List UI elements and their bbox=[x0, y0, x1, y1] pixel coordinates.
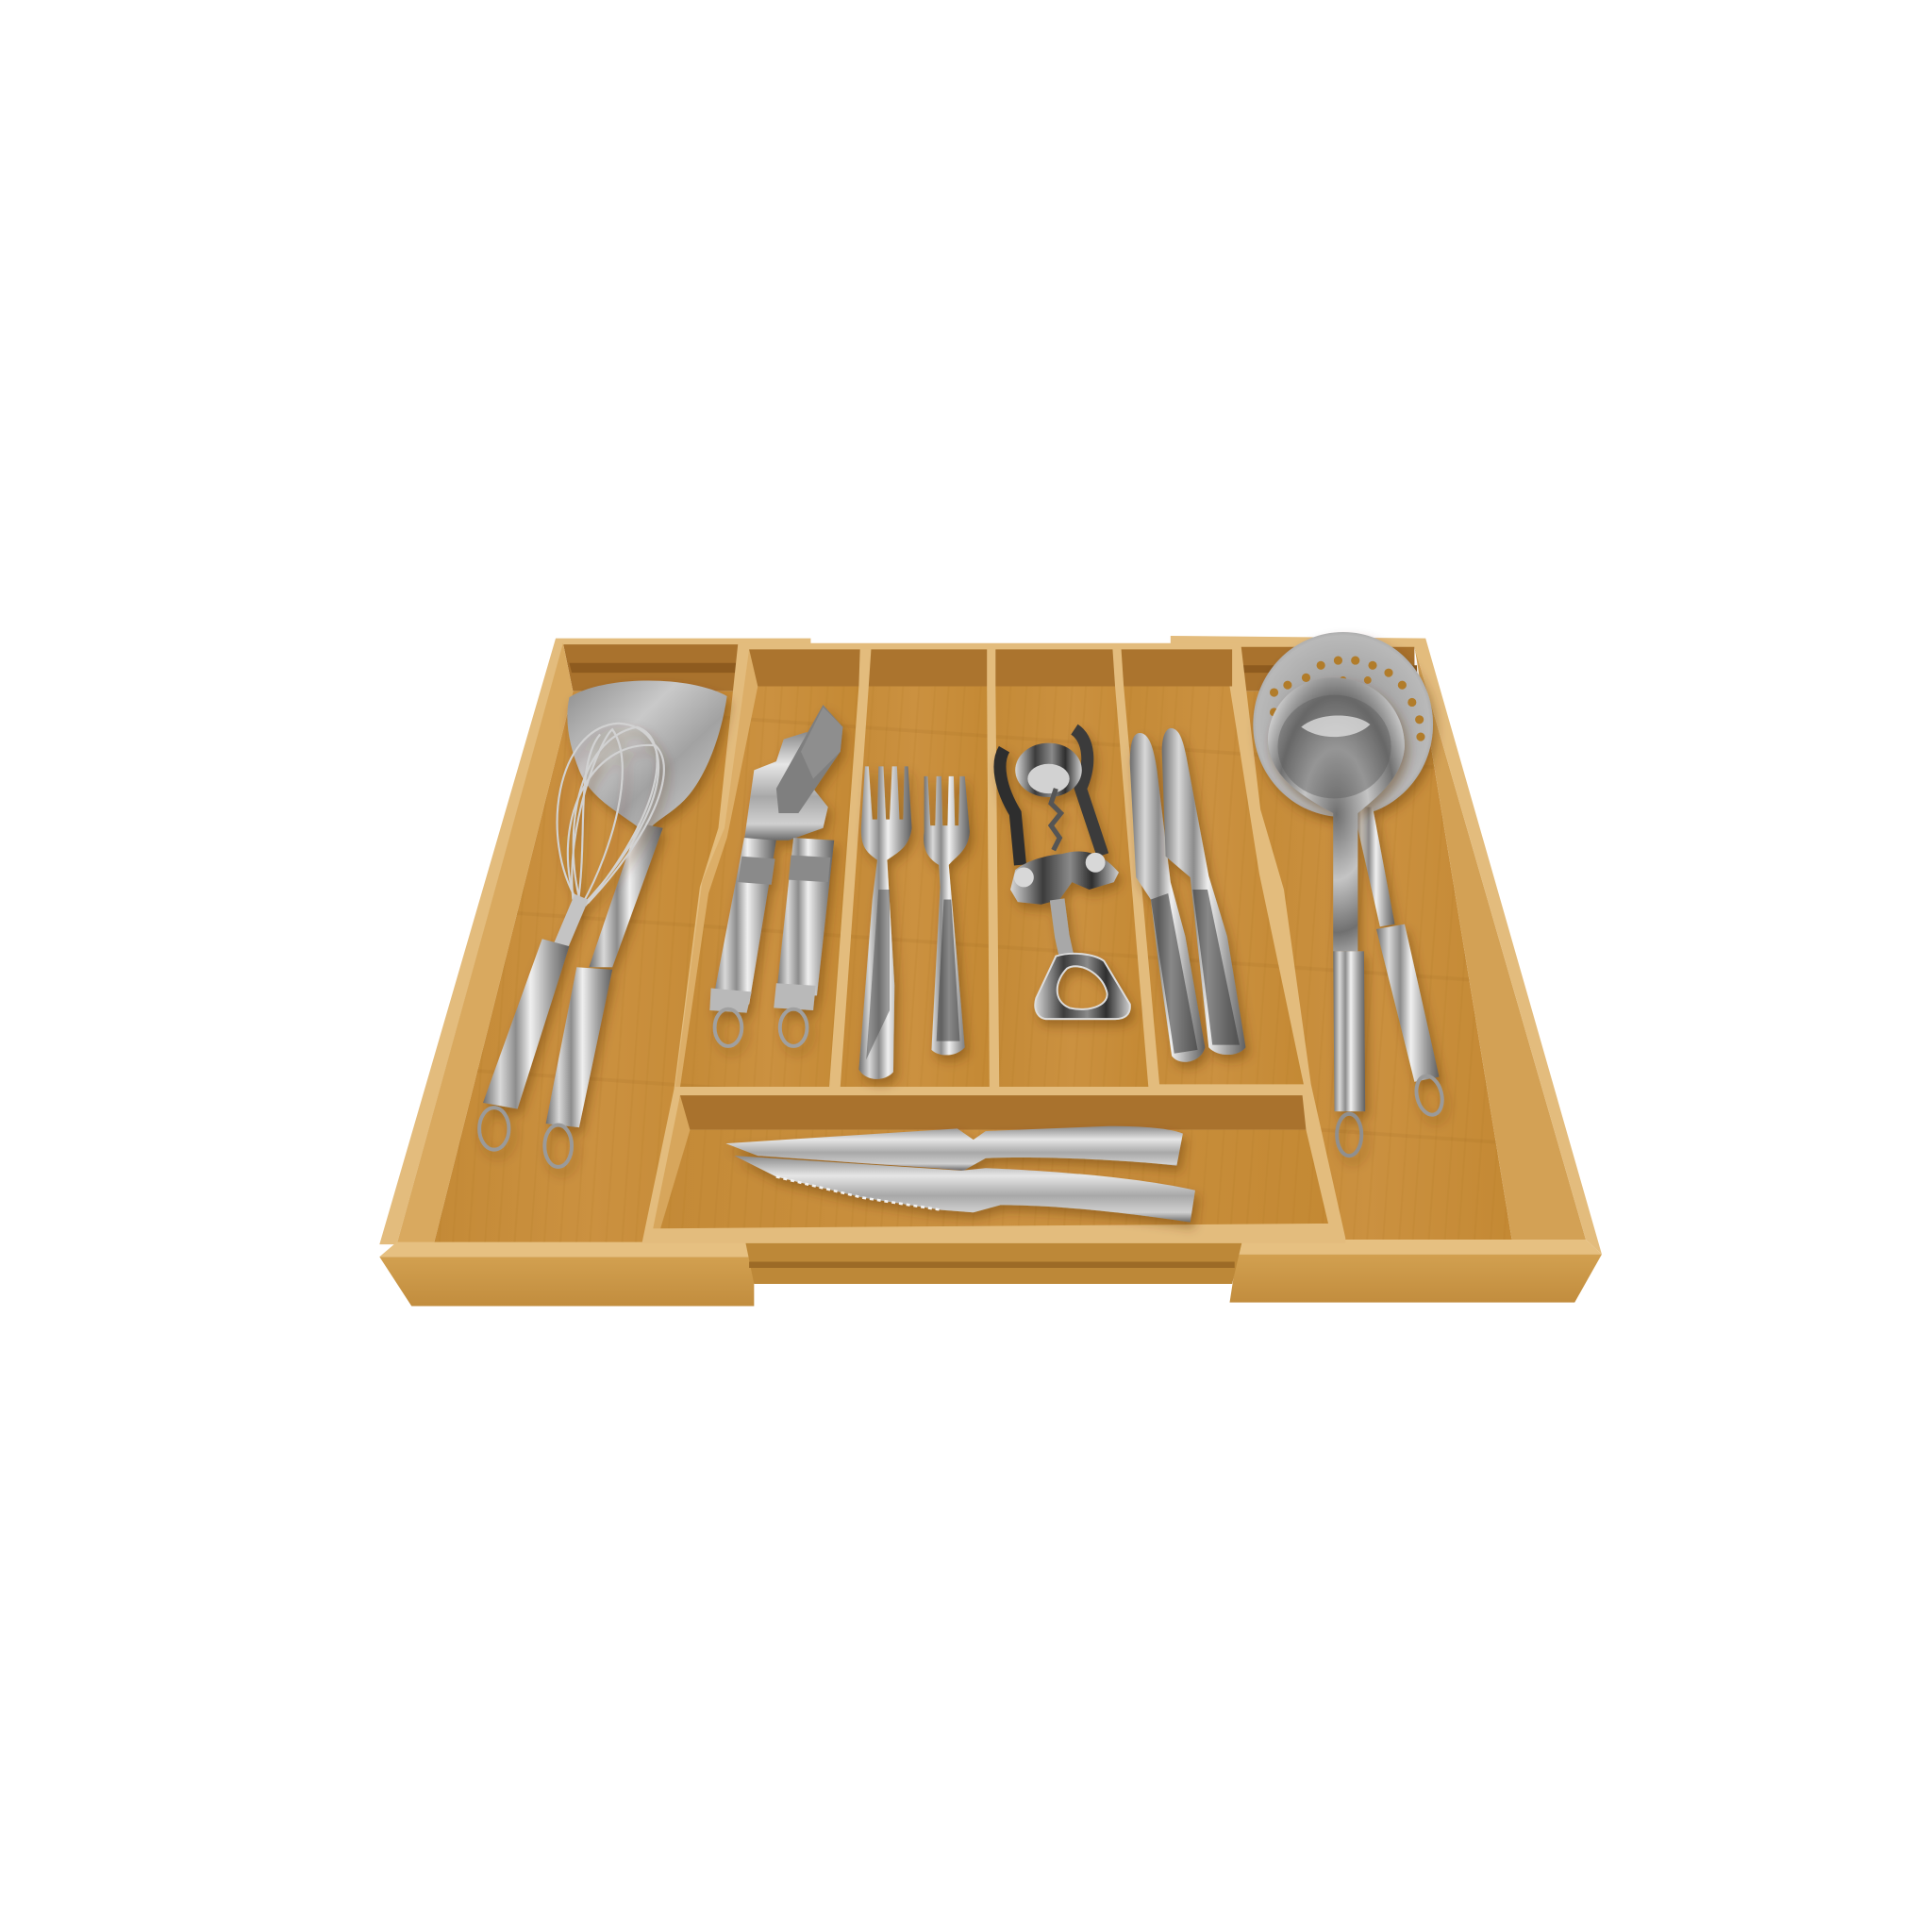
utensil: whisk bbox=[479, 724, 664, 1150]
utensil: right dinner knife bbox=[1162, 728, 1245, 1055]
utensil: left dinner knife bbox=[1130, 733, 1205, 1062]
front face left bbox=[379, 1257, 754, 1306]
back wall right bbox=[1226, 643, 1414, 691]
corkscrew worm bbox=[1051, 789, 1061, 850]
utensil: wine corkscrew bbox=[1000, 729, 1130, 1019]
front face right bbox=[1230, 1255, 1602, 1303]
utensil: ladle bbox=[1268, 677, 1405, 1156]
corkscrew stem bbox=[1058, 899, 1067, 958]
side wall left bbox=[397, 643, 573, 1244]
utensil: can opener bbox=[709, 705, 842, 1046]
bottle opener ring bbox=[1035, 954, 1130, 1019]
rim right bbox=[1171, 636, 1602, 1255]
compartment 1 bbox=[675, 649, 860, 1087]
opener right handle bbox=[776, 838, 834, 995]
panel: left sliding tray bbox=[379, 639, 810, 1306]
opener blade plate bbox=[744, 732, 828, 841]
opener gray grip bbox=[776, 705, 842, 813]
utensil: small fork bbox=[924, 776, 970, 1055]
panel: center insert bbox=[641, 643, 1345, 1243]
utensil: skimmer bbox=[1253, 632, 1446, 1118]
utensil: large fork bbox=[858, 766, 912, 1079]
back wall left bbox=[563, 643, 741, 691]
compartment 3 bbox=[995, 649, 1148, 1087]
compartment 5: lower bbox=[653, 1095, 1328, 1228]
opener left handle bbox=[712, 838, 776, 1004]
floor left bbox=[434, 691, 752, 1244]
compartment 4 bbox=[1122, 649, 1304, 1084]
compartment 2 bbox=[841, 649, 990, 1087]
corkscrew cap bbox=[1015, 743, 1082, 797]
panel: center rail bbox=[745, 1242, 1242, 1284]
floor right bbox=[1226, 691, 1512, 1240]
panel: right sliding tray bbox=[1171, 636, 1602, 1303]
front rim right bbox=[1237, 1240, 1602, 1255]
skimmer holes bbox=[1270, 657, 1425, 741]
utensil: top steak knife bbox=[725, 1126, 1183, 1171]
side wall right bbox=[1414, 647, 1586, 1240]
utensil: bottom steak knife bbox=[734, 1156, 1195, 1223]
corkscrew arms bbox=[1000, 749, 1020, 865]
front rim left bbox=[379, 1242, 754, 1257]
rim left bbox=[379, 639, 810, 1244]
utensil: spatula turner bbox=[544, 680, 727, 1167]
corkscrew body bbox=[1010, 852, 1119, 905]
